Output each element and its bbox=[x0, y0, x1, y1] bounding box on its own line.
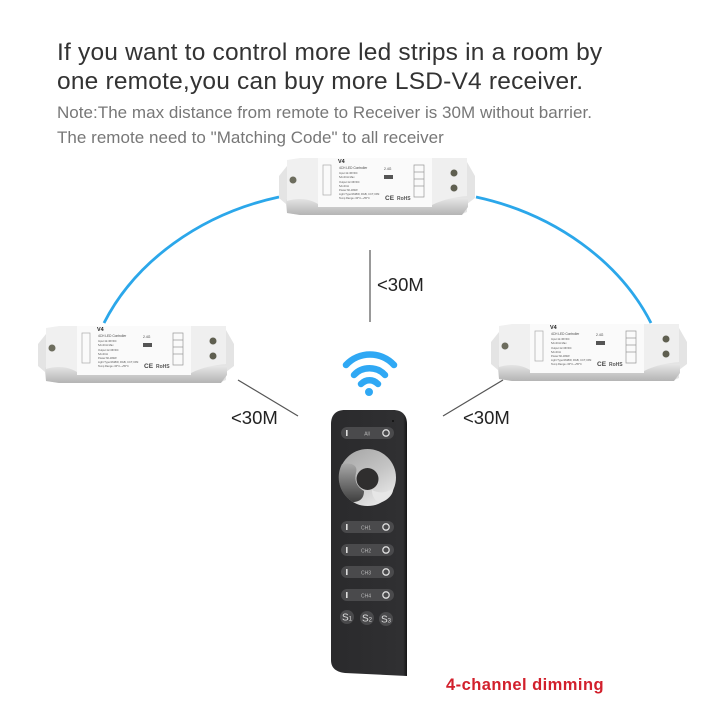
receiver: left: Temp Range:-30°C~+55°C bbox=[98, 364, 129, 368]
button: CH2: CH2 bbox=[361, 548, 371, 554]
receiver: left: Input:12-36VDC bbox=[98, 339, 117, 343]
receiver: right: Output:12-36VDC bbox=[551, 346, 572, 350]
receiver: top: Power:60-180W bbox=[339, 188, 358, 192]
title: If you want to control more led strips in a room by bbox=[57, 38, 602, 66]
button: CH3: CH3 bbox=[361, 570, 371, 576]
receiver: top: Input:12-36VDC bbox=[339, 171, 358, 175]
dial wheel bbox=[339, 449, 396, 506]
button: S1 bbox=[340, 610, 354, 624]
receiver: left: Output:12-36VDC bbox=[98, 348, 119, 352]
button: CH2 bbox=[341, 544, 394, 556]
receiver: top: 5A×4CH Max bbox=[339, 175, 355, 179]
button: S2: S2 bbox=[362, 614, 373, 624]
receiver: top: 2.4G bbox=[384, 167, 392, 171]
distance line: left bbox=[238, 380, 298, 416]
label: top distance: <30M bbox=[377, 274, 424, 295]
receiver: right: 5A×4CH Max bbox=[551, 341, 567, 345]
receiver: left: CE bbox=[144, 363, 154, 370]
button: All: All bbox=[364, 432, 370, 438]
distance line: top bbox=[369, 250, 371, 322]
receiver: top: CE bbox=[385, 195, 395, 202]
icon: wifi signal bbox=[346, 354, 394, 394]
title: one remote,you can buy more LSD-V4 receiver. bbox=[57, 68, 583, 95]
button: All bbox=[341, 427, 394, 439]
receiver: left bbox=[38, 326, 234, 383]
label: right distance: <30M bbox=[463, 407, 510, 428]
receiver: right: CE bbox=[597, 361, 607, 368]
button: CH3 bbox=[341, 566, 394, 578]
receiver: top: Temp Range:-30°C~+55°C bbox=[339, 196, 370, 200]
remote control bbox=[331, 410, 407, 676]
receiver: left: 5A×4CH Max bbox=[98, 343, 114, 347]
receiver: top bbox=[279, 158, 475, 215]
receiver: right: Temp Range:-30°C~+55°C bbox=[551, 362, 582, 366]
caption: 4-channel dimming: 4-channel dimming bbox=[446, 676, 604, 694]
receiver: top: RoHS bbox=[397, 196, 411, 202]
label: left distance: <30M bbox=[231, 407, 278, 428]
receiver: right: Input:12-36VDC bbox=[551, 337, 570, 341]
receiver: left: 2.4G bbox=[143, 335, 151, 339]
title bbox=[57, 38, 602, 95]
button: CH4 bbox=[341, 589, 394, 601]
receiver: left: Light Type:RGBW, RGB, CCT, DIM bbox=[98, 360, 138, 364]
arc: link to right receiver bbox=[476, 197, 651, 323]
note text: The remote need to "Matching Code" to all receiver bbox=[57, 128, 444, 146]
note text: Note:The max distance from remote to Receiver is 30M without barrier. bbox=[57, 102, 592, 122]
receiver: right: 2.4G bbox=[596, 333, 604, 337]
receiver: top: 5A×4CH bbox=[339, 184, 349, 188]
button: S3 bbox=[379, 612, 393, 626]
receiver: right bbox=[491, 324, 687, 381]
receiver: left: 4CH LED Controller bbox=[98, 334, 127, 338]
receiver: left: V4 bbox=[97, 327, 105, 333]
receiver: top: Output:12-36VDC bbox=[339, 180, 360, 184]
receiver: top: V4 bbox=[338, 159, 346, 165]
button: S1: S1 bbox=[342, 612, 353, 624]
receiver: right: 4CH LED Controller bbox=[551, 332, 580, 336]
distance line: right bbox=[443, 380, 503, 416]
button: S2 bbox=[360, 611, 374, 625]
receiver: right: RoHS bbox=[609, 362, 623, 368]
arc: link to left receiver bbox=[104, 197, 279, 323]
button: S3: S3 bbox=[381, 614, 392, 626]
receiver: left: RoHS bbox=[156, 364, 170, 370]
button: CH4: CH4 bbox=[361, 594, 371, 600]
receiver: top: 4CH LED Controller bbox=[339, 166, 368, 170]
button: CH1 bbox=[341, 521, 394, 533]
receiver: right: V4 bbox=[550, 325, 558, 331]
receiver: right: Power:60-180W bbox=[551, 354, 570, 358]
receiver: right: 5A×4CH bbox=[551, 350, 561, 354]
note text bbox=[57, 102, 592, 146]
receiver: top: Light Type:RGBW, RGB, CCT, DIM bbox=[339, 192, 379, 196]
button: CH1: CH1 bbox=[361, 526, 371, 532]
receiver: right: Light Type:RGBW, RGB, CCT, DIM bbox=[551, 358, 591, 362]
receiver: left: 5A×4CH bbox=[98, 352, 108, 356]
receiver: left: Power:60-180W bbox=[98, 356, 117, 360]
